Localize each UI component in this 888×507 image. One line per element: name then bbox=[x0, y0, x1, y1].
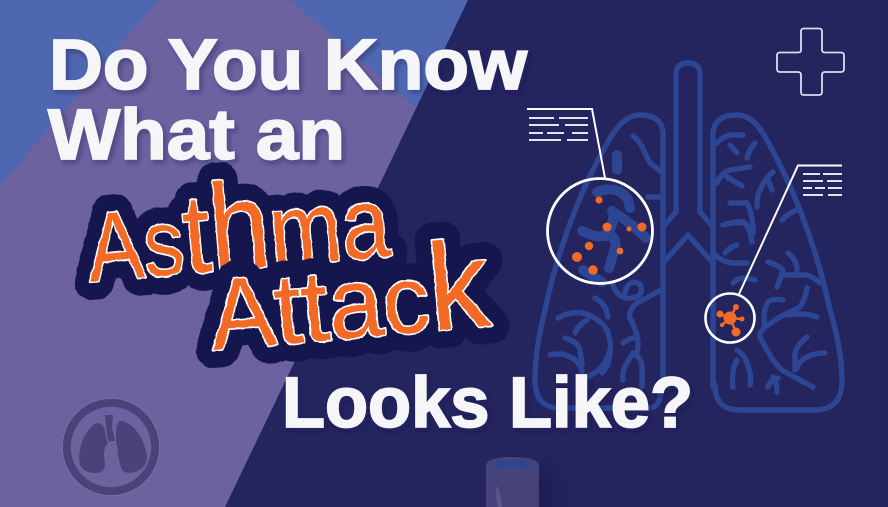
icon: lungs badge bbox=[62, 398, 160, 496]
trachea and bronchi outline bbox=[663, 63, 713, 387]
background: purple band bbox=[0, 0, 450, 507]
callout: right note lines bbox=[803, 174, 842, 195]
word: Asthma: Asthma bbox=[80, 145, 395, 309]
magnified airways bbox=[582, 189, 646, 282]
title line 2: What an bbox=[48, 96, 345, 175]
callout: right leader line bbox=[739, 166, 842, 294]
inhaler body bbox=[486, 457, 539, 507]
title bbox=[48, 26, 693, 443]
callout: right circle with particle bbox=[706, 294, 754, 342]
callout: left circle magnified airways bbox=[548, 178, 652, 284]
background: dark navy panel bbox=[225, 0, 888, 507]
icon: medical cross outline bbox=[777, 28, 844, 95]
badge edge bbox=[62, 398, 160, 496]
badge lungs bbox=[79, 415, 147, 473]
inhaler partly visible bbox=[486, 457, 553, 507]
word: Attack: Attack bbox=[203, 215, 495, 377]
right lung airways bbox=[713, 135, 825, 392]
title line 1: Do You Know bbox=[49, 26, 528, 105]
badge ring bbox=[67, 403, 155, 491]
word: Attack: Attack bbox=[203, 215, 495, 377]
inhaler opening bbox=[492, 460, 534, 468]
callout: left note lines bbox=[529, 118, 588, 140]
left lung airways bbox=[550, 136, 663, 387]
right lung outline bbox=[713, 115, 842, 410]
small magnifier ring bbox=[706, 294, 754, 342]
inhaler shadow bbox=[505, 470, 553, 507]
callout: left leader line bbox=[527, 109, 605, 178]
highlighted words: Asthma Attack bbox=[80, 145, 495, 377]
word: Asthma: Asthma bbox=[80, 145, 395, 309]
icon: orange particle bbox=[716, 304, 744, 336]
title line 3: Looks Like? bbox=[282, 364, 693, 443]
allergen dots bbox=[572, 196, 646, 275]
left lung outline bbox=[535, 115, 663, 408]
magnifier ring bbox=[548, 178, 652, 284]
lungs illustration bbox=[535, 63, 842, 410]
inhaler highlight bbox=[496, 485, 502, 507]
